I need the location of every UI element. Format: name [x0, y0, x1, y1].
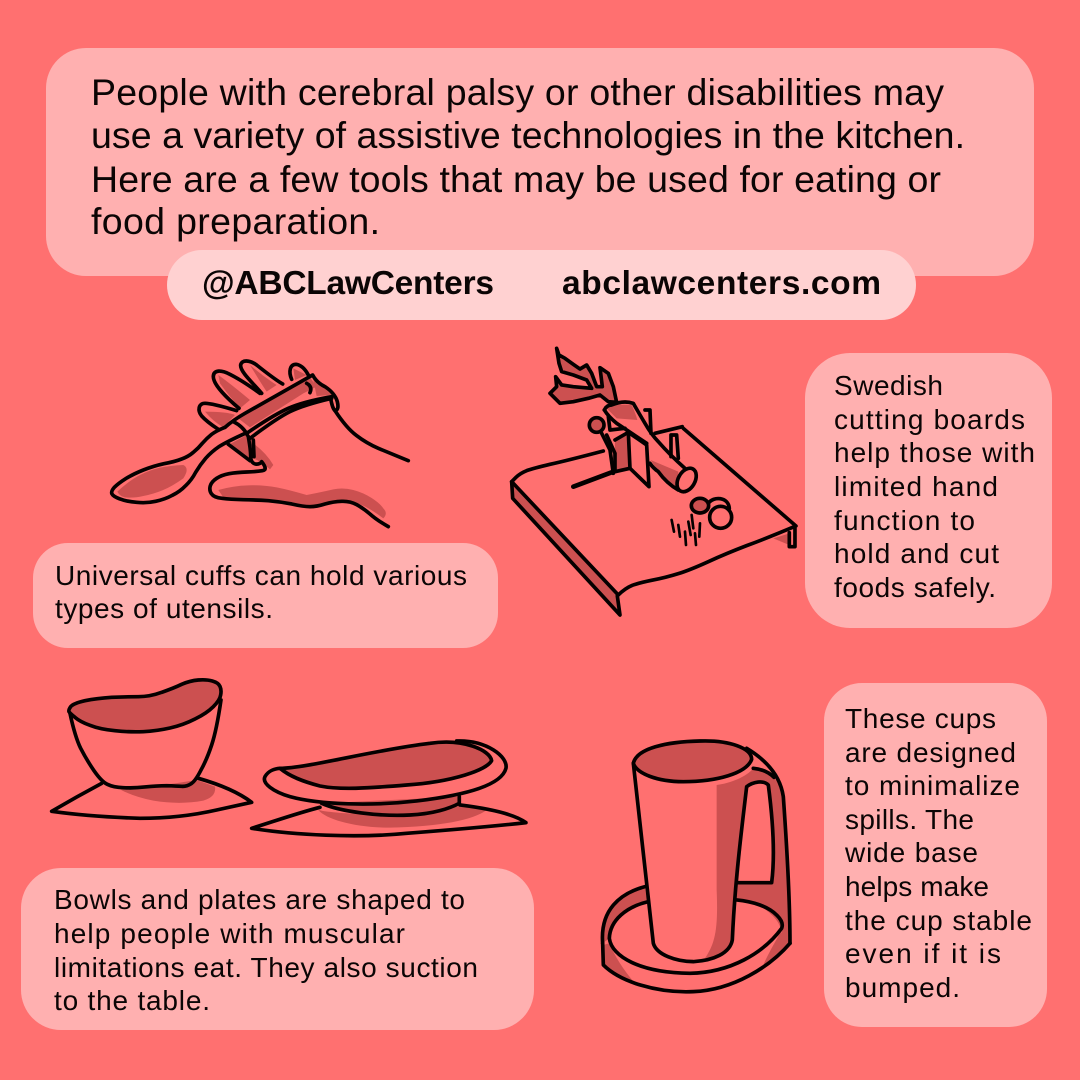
panel: universal cuffs caption: types of utensils. [55, 593, 273, 624]
panel: bowls and plates caption: limitations eat. They also suction [54, 952, 478, 983]
panel: Swedish cutting boards caption: cutting boards [834, 404, 1025, 435]
panel: Swedish cutting boards caption [805, 353, 1052, 628]
panel: cups caption: bumped. [845, 972, 960, 1003]
panel: introduction: food preparation. [91, 200, 380, 242]
icon: wide-base spill-resistant cup [602, 741, 790, 992]
panel: Swedish cutting boards caption: foods safely. [834, 572, 996, 603]
panel: introduction: Here are a few tools that may be used for eating or [91, 158, 941, 200]
panel: bowls and plates caption [21, 868, 534, 1030]
panel: cups caption [824, 683, 1047, 1027]
panel: Swedish cutting boards caption: limited hand [834, 471, 998, 502]
icon: scoop bowl and plate on suction bases [52, 680, 526, 836]
panel: Swedish cutting boards caption: Swedish [834, 370, 943, 401]
panel: cups caption: are designed [845, 737, 1016, 768]
panel: cups caption: These cups [845, 703, 996, 734]
panel: Swedish cutting boards caption: hold and cut [834, 538, 999, 569]
panel: bowls and plates caption: Bowls and plates are shaped to [54, 884, 465, 915]
panel: universal cuffs caption: Universal cuffs can hold various [55, 560, 467, 591]
panel: cups caption: to minimalize [845, 770, 1020, 801]
panel: social handle and website: abclawcenters.com [562, 265, 881, 302]
panel: Swedish cutting boards caption: function to [834, 505, 975, 536]
panel: bowls and plates caption: to the table. [54, 985, 210, 1016]
panel: cups caption: the cup stable [845, 905, 1032, 936]
panel: cups caption: even if it is [845, 938, 1001, 969]
panel: introduction: use a variety of assistive technologies in the kitchen. [91, 114, 965, 156]
panel: bowls and plates caption: help people with muscular [54, 918, 405, 949]
panel: introduction [46, 48, 1034, 276]
panel: cups caption: helps make [845, 871, 989, 902]
icon: universal cuff holding spoon [112, 361, 408, 527]
panel: cups caption: wide base [844, 837, 978, 868]
panel: universal cuffs caption [33, 543, 498, 648]
panel: social handle and website: @ABCLawCenters [202, 265, 494, 302]
icon: Swedish cutting board with carrot [512, 348, 796, 615]
panel: introduction: People with cerebral palsy or other disabilities may [91, 71, 944, 113]
panel: social handle and website [167, 250, 916, 320]
panel: Swedish cutting boards caption: help those with [834, 437, 1035, 468]
panel: cups caption: spills. The [845, 804, 974, 835]
